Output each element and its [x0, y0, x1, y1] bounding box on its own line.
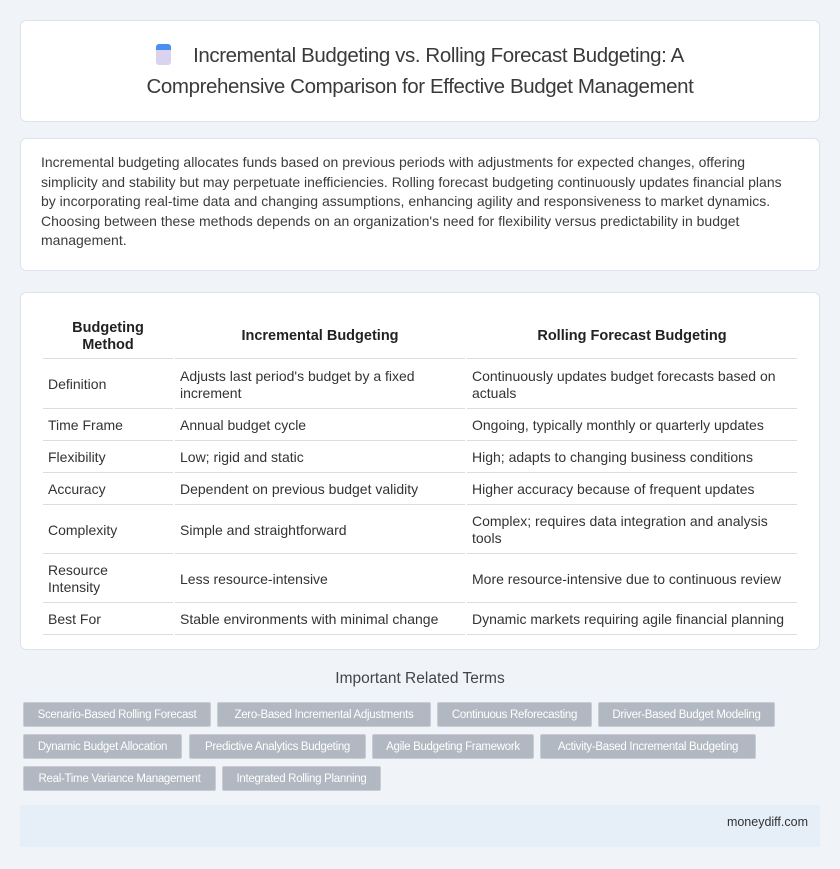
- comparison table: Adjusts last period's budget by a fixed increment: [180, 368, 415, 400]
- comparison table: Resource: [48, 562, 108, 578]
- title: Comprehensive Comparison for Effective Budget Management: [147, 75, 693, 98]
- comparison table: Annual budget cycle: [180, 417, 306, 433]
- comparison table: Incremental Budgeting: [241, 328, 399, 344]
- comparison table: Dynamic markets requiring agile financial planning: [472, 611, 784, 627]
- comparison table: Time Frame: [48, 417, 123, 433]
- comparison table: Less resource-intensive: [180, 570, 328, 586]
- comparison table: Complexity: [48, 522, 117, 538]
- related terms tags: Real-Time Variance Management: [39, 772, 200, 784]
- comparison table: Best For: [48, 611, 101, 627]
- comparison table: [43, 320, 797, 635]
- comparison table: Budgeting: [72, 320, 144, 336]
- comparison table: Continuously updates budget forecasts based on actuals: [472, 368, 776, 400]
- header card: [20, 20, 820, 122]
- comparison table: Stable environments with minimal change: [180, 611, 438, 627]
- related terms tags: Zero-Based Incremental Adjustments: [234, 708, 414, 720]
- description text: Incremental budgeting allocates funds based on previous periods with adjustments for expected changes, offering simplicity and stability but may perpetuate inefficiencies. Rolling forecast budgeting continuously updates financial plans by incorporating real-time data and changing assumptions, enhancing agility and responsiveness to market dynamics. Choosing between these methods depends on an organization's need for flexibility versus predictability in budget management.: [41, 154, 782, 248]
- comparison table: Ongoing, typically monthly or quarterly updates: [472, 417, 764, 433]
- comparison table: Low; rigid and static: [180, 449, 304, 465]
- comparison table: Higher accuracy because of frequent updates: [472, 481, 755, 497]
- comparison table: tools: [472, 530, 502, 546]
- footer: moneydiff.com: [727, 815, 808, 829]
- related terms tags: Activity-Based Incremental Budgeting: [558, 740, 738, 752]
- comparison table: Accuracy: [48, 481, 106, 497]
- comparison table: Dependent on previous budget validity: [180, 481, 418, 497]
- related terms tags: Driver-Based Budget Modeling: [612, 708, 761, 720]
- footer: [20, 805, 820, 847]
- comparison table card: [20, 292, 820, 650]
- related terms tags: Continuous Reforecasting: [452, 708, 577, 720]
- comparison table: More resource-intensive due to continuous review: [472, 570, 781, 586]
- related terms tags: Scenario-Based Rolling Forecast: [38, 708, 196, 720]
- comparison table: Rolling Forecast Budgeting: [537, 328, 727, 344]
- comparison table: Simple and straightforward: [180, 522, 347, 538]
- comparison table: Intensity: [48, 579, 100, 595]
- title: Incremental Budgeting vs. Rolling Forecast Budgeting: A: [193, 44, 684, 67]
- related terms tags: Agile Budgeting Framework: [386, 740, 520, 752]
- related terms tags: Integrated Rolling Planning: [236, 772, 366, 784]
- comparison table: High; adapts to changing business conditions: [472, 449, 753, 465]
- related terms heading: Important Related Terms: [335, 670, 505, 687]
- comparison table: Complex; requires data integration and analysis: [472, 513, 768, 529]
- description card: [20, 138, 820, 271]
- related terms tags: Dynamic Budget Allocation: [38, 740, 167, 752]
- comparison table: Flexibility: [48, 449, 106, 465]
- related terms tags: Predictive Analytics Budgeting: [205, 740, 350, 752]
- comparison table: Definition: [48, 376, 106, 392]
- comparison table: Method: [82, 336, 134, 352]
- title: [147, 44, 694, 98]
